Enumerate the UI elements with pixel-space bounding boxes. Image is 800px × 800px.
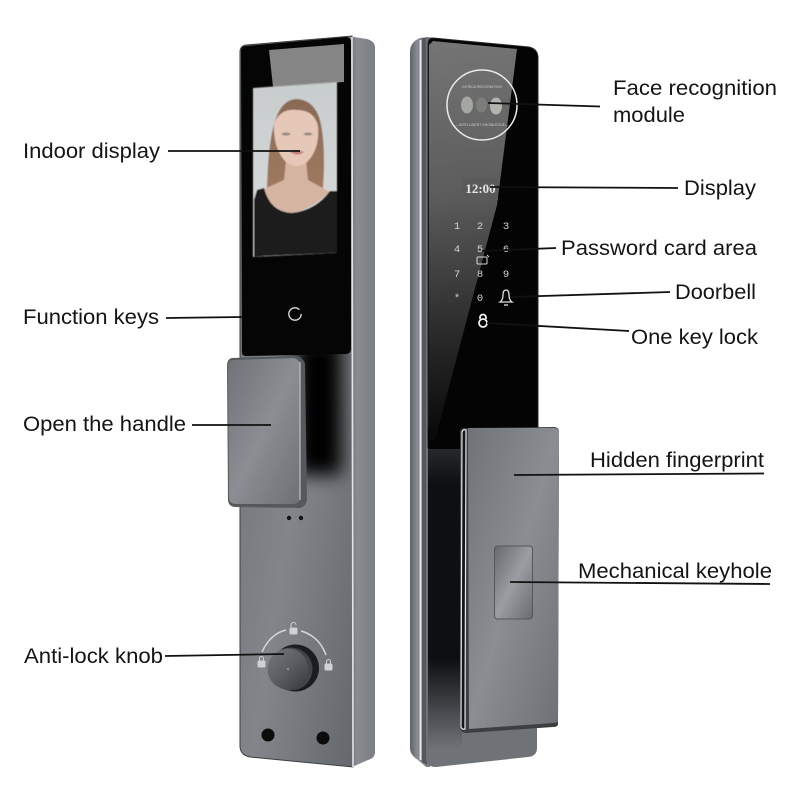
black top [254, 188, 337, 257]
metal face plate [240, 36, 353, 767]
display clock: 12:00 [465, 181, 496, 196]
display clock [463, 178, 498, 200]
doorbell icon [500, 290, 512, 305]
recessed shadow area [428, 449, 462, 749]
face [274, 110, 318, 166]
eyes and mouth [282, 132, 290, 136]
lock back view [410, 37, 559, 767]
handle [227, 356, 307, 508]
lock icons [258, 622, 332, 670]
label: Display: Display [684, 176, 756, 200]
label: Face recognition module [613, 76, 777, 127]
label: Anti-lock knob: Anti-lock knob [24, 644, 163, 668]
label: Indoor display: Indoor display [23, 139, 160, 163]
mechanical keyhole cover [494, 546, 532, 619]
anti-lock knob [268, 644, 319, 692]
metal plate [426, 37, 537, 767]
face photo on display [253, 82, 337, 257]
hair [267, 99, 324, 191]
side edge [410, 37, 430, 767]
keypad: 4 [454, 244, 460, 256]
keypad: 2 [477, 221, 483, 233]
black glass screen [241, 37, 351, 356]
glass reflection [429, 41, 517, 440]
glass reflection [269, 44, 344, 87]
leader lines [165, 103, 770, 656]
label: Open the handle: Open the handle [23, 412, 186, 436]
shadow beside handle [296, 340, 342, 475]
keypad: 5 [477, 244, 483, 256]
black glass panel [428, 38, 538, 449]
label: Function keys: Function keys [23, 305, 159, 329]
side edge [347, 36, 375, 767]
lock key icon [479, 314, 487, 327]
face recognition module: —INTELLIGENT KNOWLEDGE— [455, 123, 509, 127]
keypad: 1 [454, 221, 460, 233]
speaker dots [287, 516, 303, 520]
label: Hidden fingerprint: Hidden fingerprint [590, 448, 764, 472]
face recognition module [447, 70, 517, 140]
screw holes [262, 728, 330, 744]
keypad: 0 [477, 293, 483, 305]
keypad: 8 [477, 269, 483, 281]
keypad: 6 [503, 244, 509, 256]
card icon [477, 255, 489, 264]
label: Face recognition module: Face recognition [613, 76, 777, 100]
keypad: * [454, 293, 460, 305]
neck and chest [262, 160, 330, 213]
keypad: 9 [503, 269, 509, 281]
label: Password card area: Password card area [561, 236, 757, 260]
lock front view [227, 36, 375, 767]
unlock arc [262, 630, 326, 655]
keypad [454, 221, 509, 305]
label: Mechanical keyhole: Mechanical keyhole [578, 559, 772, 583]
label: One key lock: One key lock [631, 325, 758, 349]
label: Doorbell: Doorbell [675, 280, 756, 304]
face recognition module: INTRICA RECOGNITION [462, 85, 502, 89]
function key ring [289, 308, 301, 320]
keypad: 7 [454, 269, 460, 281]
keypad: 3 [503, 221, 509, 233]
label: Face recognition module: module [613, 103, 685, 127]
handle with fingerprint sensor [460, 427, 559, 733]
